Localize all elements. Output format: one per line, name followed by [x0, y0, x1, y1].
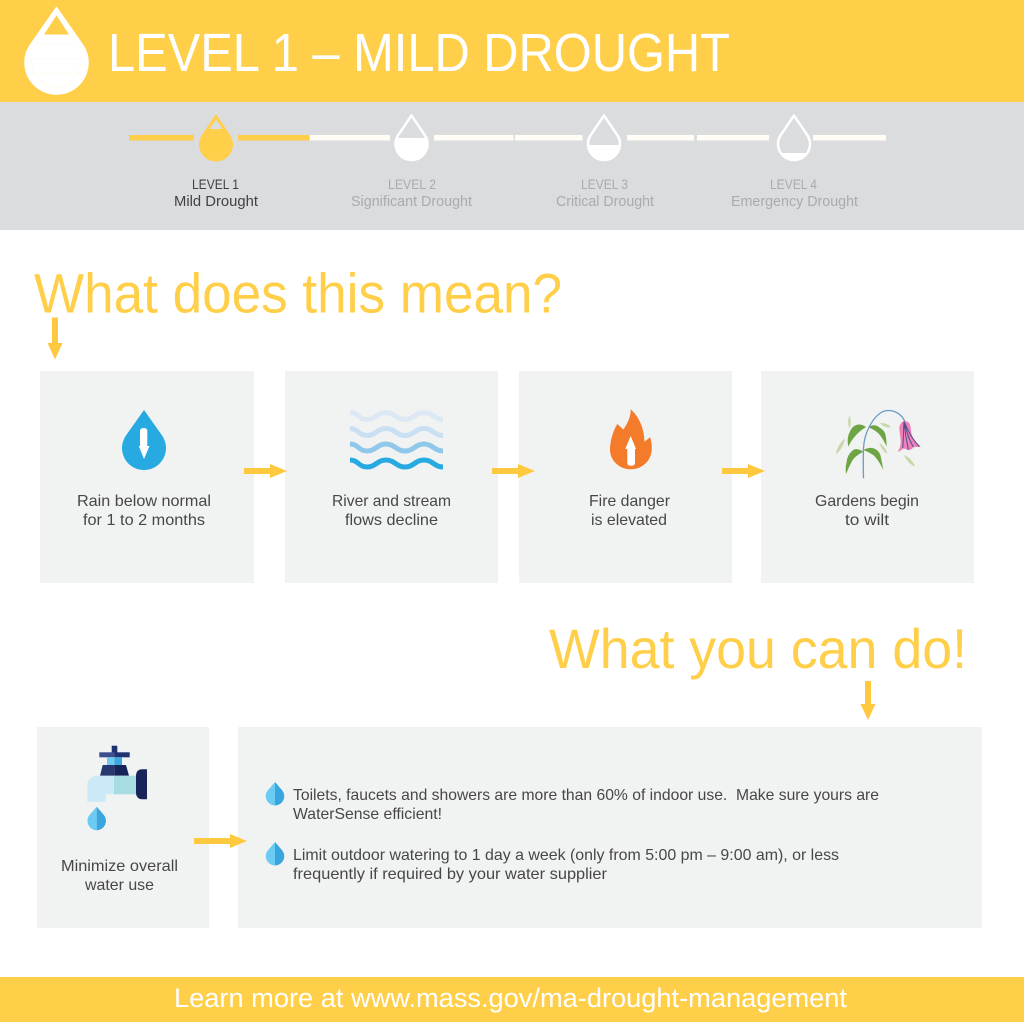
label: level 2: [351, 176, 473, 210]
text: [77, 493, 211, 529]
text: flows decline: [345, 512, 438, 529]
panel: action list: [238, 727, 982, 928]
icon: level 2 drop: [396, 116, 428, 160]
text: water use: [84, 877, 154, 894]
icon: large white water drop: [25, 8, 88, 94]
text: is elevated: [591, 512, 667, 529]
footer banner: [0, 977, 1024, 1022]
arrow: to action list: [194, 834, 247, 848]
arrow: card 1 to 2: [244, 464, 287, 478]
icon: rain drop with down arrow: [122, 410, 166, 470]
text: bullet 2: [293, 847, 839, 883]
panel: river flows: [285, 371, 498, 583]
text: bullet 2: Limit outdoor watering to 1 day a week (only from 5:00 pm – 9:00 am), or less: [293, 847, 839, 864]
arrow: down to cards: [48, 318, 62, 360]
panel: fire danger: [519, 371, 732, 583]
footer link text: Learn more at www.mass.gov/ma-drought-management: [174, 983, 847, 1013]
icon: bullet drop 2: [266, 842, 284, 866]
arrow: down to actions: [860, 681, 876, 720]
text: Fire danger: [589, 493, 671, 510]
icon: wilting flower: [836, 410, 921, 478]
text: Rain below normal: [77, 493, 211, 510]
label: level 2: Significant Drought: [351, 193, 473, 210]
icon: flame with up arrow: [610, 409, 652, 469]
text: to wilt: [845, 512, 890, 529]
label: level 1: LEVEL 1: [192, 176, 239, 192]
text: bullet 2: frequently if required by your water supplier: [293, 866, 608, 883]
panel: minimize water use: [37, 727, 209, 928]
icon: waves: [350, 412, 443, 467]
text: [332, 493, 451, 529]
text: Gardens begin: [815, 493, 919, 510]
progress line segments: [129, 135, 886, 140]
text: for 1 to 2 months: [83, 512, 205, 529]
text: [815, 493, 919, 529]
label: level 4: [731, 176, 859, 210]
label: level 1: [174, 176, 259, 210]
header banner: [0, 0, 1024, 102]
heading: what does this mean: What does this mean?: [34, 262, 562, 324]
arrow: card 3 to 4: [722, 464, 765, 478]
text: bullet 1: WaterSense efficient!: [293, 806, 442, 823]
heading: what you can do: What you can do!: [549, 617, 967, 680]
title: LEVEL 1 – MILD DROUGHT: [108, 23, 730, 83]
icon: bullet drop 1: [266, 782, 284, 806]
text: [589, 493, 671, 529]
icon: level 3 drop: [588, 116, 620, 160]
arrow: card 2 to 3: [492, 464, 535, 478]
label: level 3: [556, 176, 655, 210]
label: level 4: Emergency Drought: [731, 193, 859, 210]
label: level 3: Critical Drought: [556, 193, 655, 210]
label: level 4: LEVEL 4: [770, 176, 817, 192]
panel: rain below normal: [40, 371, 254, 583]
icon: faucet: [87, 746, 147, 830]
text: [61, 858, 178, 894]
text: River and stream: [332, 493, 451, 510]
panel: gardens wilt: [761, 371, 974, 583]
text: Minimize overall: [61, 858, 178, 875]
text: bullet 1: Toilets, faucets and showers are more than 60% of indoor use. Make sure yours are: [293, 787, 879, 804]
label: level 2: LEVEL 2: [388, 176, 436, 192]
label: level 1: Mild Drought: [174, 193, 259, 210]
icon: level 4 drop: [778, 116, 810, 160]
text: bullet 1: [293, 787, 879, 823]
icon: level 1 drop: [199, 114, 233, 161]
label: level 3: LEVEL 3: [581, 176, 628, 192]
panel: drought level progress: [0, 102, 1024, 230]
